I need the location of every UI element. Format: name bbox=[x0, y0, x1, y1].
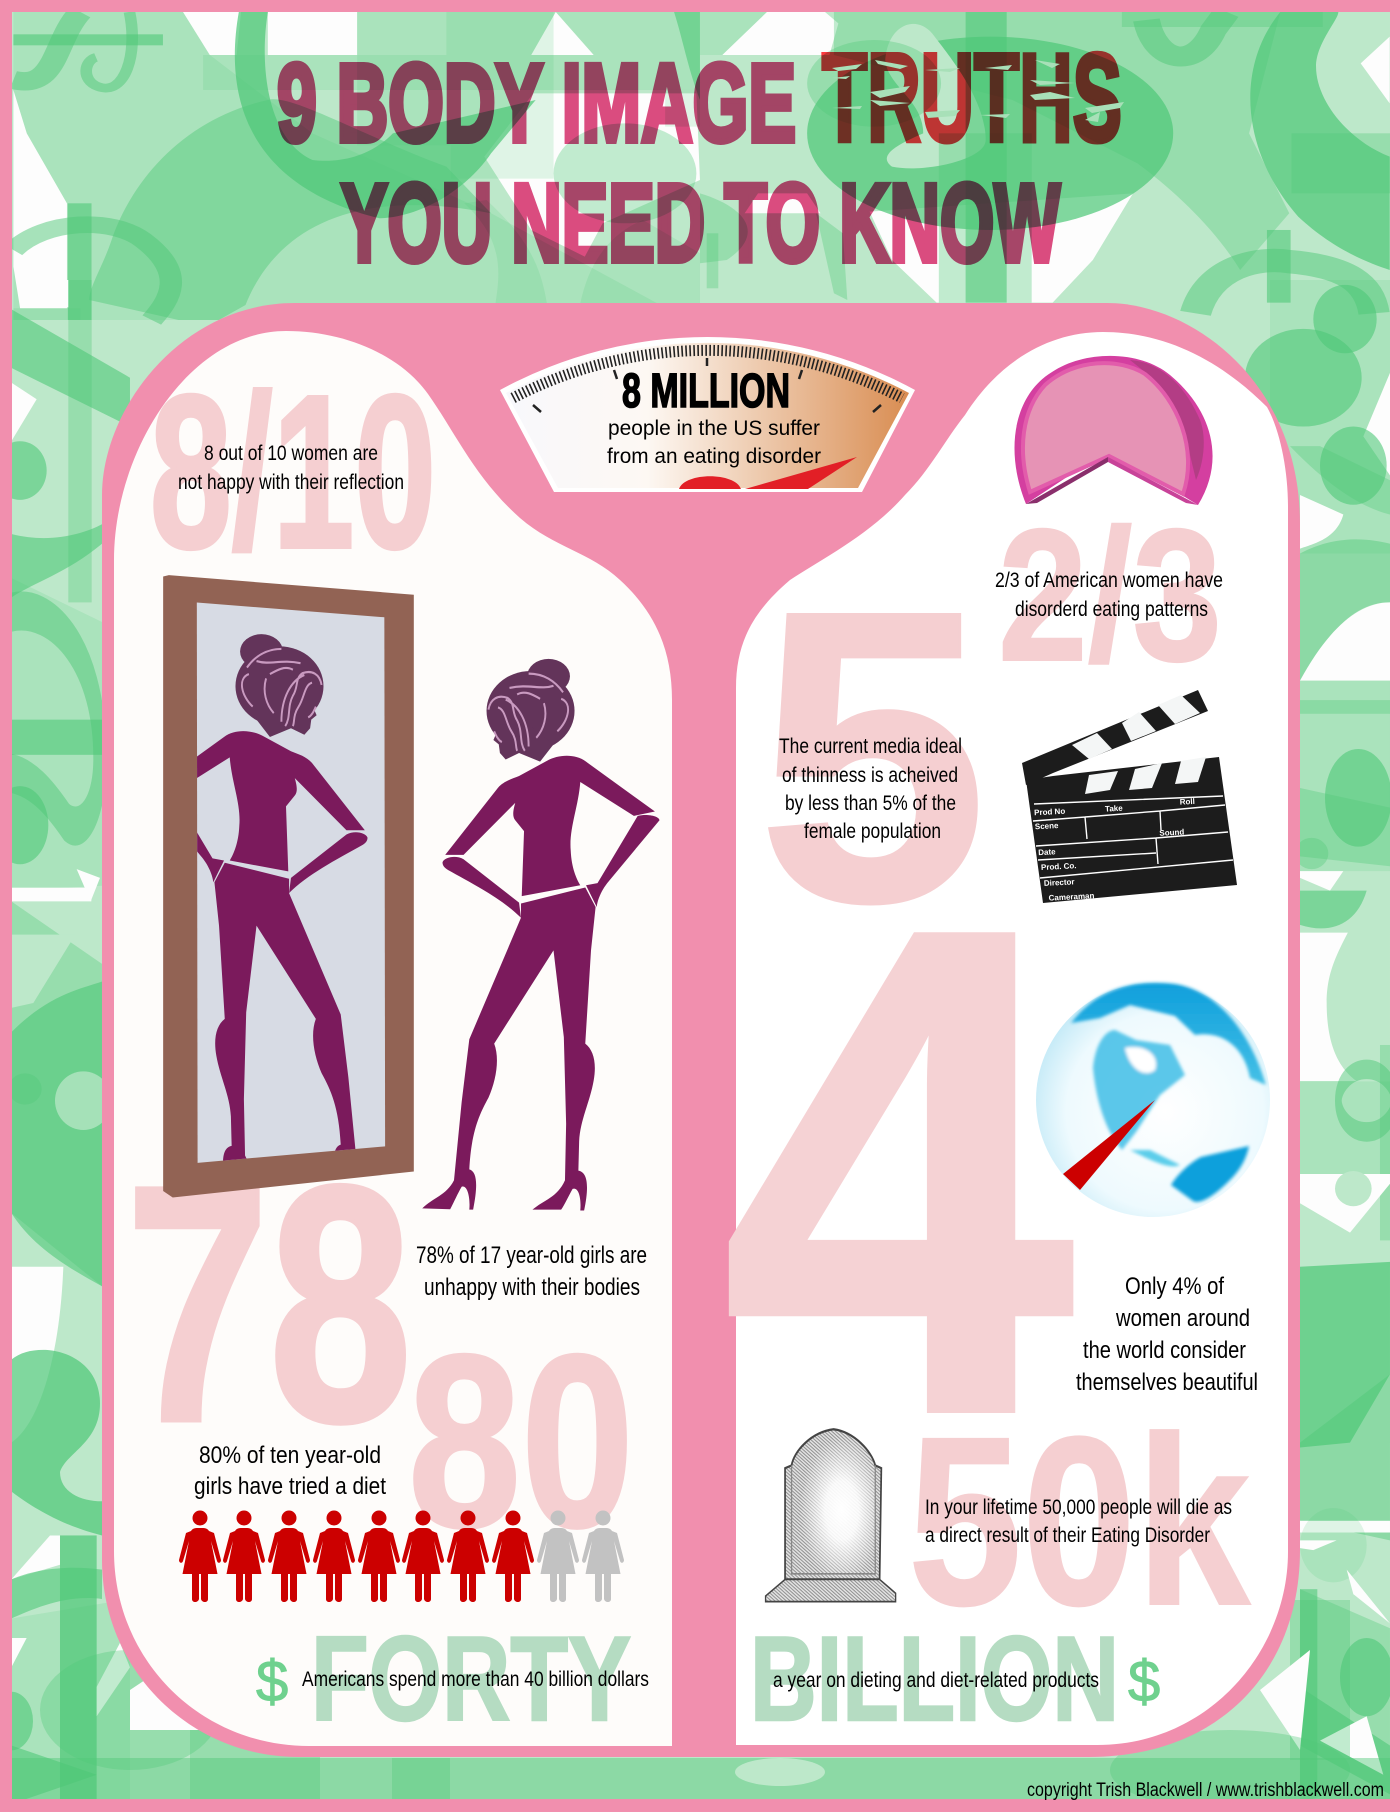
text: 78 percent bbox=[416, 1242, 647, 1301]
text: 8 out of 10 women bbox=[178, 442, 404, 494]
title word: truths: TRUTHS bbox=[822, 29, 1122, 168]
title line 1: 9 BODY IMAGE bbox=[277, 42, 796, 165]
title bbox=[277, 29, 1124, 285]
label: from an eating disorder: from an eating disorder bbox=[607, 445, 821, 468]
icon: film clapperboard: Roll bbox=[1180, 797, 1195, 807]
main pink panel bbox=[102, 303, 1300, 1757]
woman silhouette bbox=[422, 659, 660, 1211]
title word: truths bbox=[822, 29, 1124, 168]
icon: film clapperboard: Director bbox=[1044, 877, 1075, 888]
icon: dollar left: $ bbox=[256, 1649, 288, 1714]
icon: globe with wedge bbox=[1036, 983, 1270, 1217]
text: media ideal bbox=[779, 735, 962, 843]
big number: 4: 4 bbox=[722, 786, 1078, 1557]
text: media ideal: The current media ideal bbox=[779, 735, 962, 758]
icon: dollar right: $ bbox=[1128, 1649, 1160, 1714]
icon: tombstone bbox=[766, 1429, 896, 1602]
text: 50,000 people bbox=[925, 1496, 1232, 1547]
text: only 4 percent bbox=[1076, 1273, 1258, 1396]
stat: 8 million: 8 MILLION bbox=[622, 365, 790, 418]
text: media ideal: of thinness is acheived bbox=[782, 764, 958, 787]
text: 80 percent: girls have tried a diet bbox=[194, 1473, 386, 1500]
big word: forty: FORTY bbox=[311, 1612, 631, 1746]
text: a year on dieting: a year on dieting and diet-related products bbox=[773, 1669, 1099, 1692]
pictogram: 10 girls, 8 red bbox=[179, 1510, 624, 1602]
text: americans spend: Americans spend more than 40 billion dollars bbox=[302, 1668, 649, 1691]
text: 50,000 people: a direct result of their Eating Disorder bbox=[925, 1524, 1210, 1547]
text: 8 out of 10 women: 8 out of 10 women are bbox=[204, 442, 378, 465]
text: 78 percent: unhappy with their bodies bbox=[424, 1274, 640, 1301]
big number: 78: 78 bbox=[126, 1117, 412, 1492]
icon: film clapperboard: Scene bbox=[1035, 821, 1059, 831]
text: 2/3 of women bbox=[995, 569, 1223, 621]
text: only 4 percent: Only 4% of bbox=[1125, 1273, 1224, 1300]
text: only 4 percent: themselves beautiful bbox=[1076, 1369, 1258, 1396]
icon: film clapperboard: Take bbox=[1105, 804, 1123, 814]
big number: 50k: 50k bbox=[908, 1387, 1250, 1655]
text: 50,000 people: In your lifetime 50,000 people will die as bbox=[925, 1496, 1232, 1519]
needle bbox=[679, 457, 857, 489]
icon: film clapperboard: Prod No bbox=[1034, 807, 1066, 817]
text: 78 percent: 78% of 17 year-old girls are bbox=[416, 1242, 647, 1269]
right white panel bbox=[736, 332, 1288, 1745]
mirror with reflection bbox=[151, 575, 414, 1198]
icon: film clapperboard bbox=[1022, 690, 1237, 903]
text: only 4 percent: the world consider bbox=[1083, 1337, 1246, 1364]
text: media ideal: female population bbox=[804, 820, 941, 843]
text: 8 out of 10 women: not happy with their reflection bbox=[178, 471, 404, 494]
text: 80 percent: 80% of ten year-old bbox=[199, 1442, 381, 1469]
wedge bbox=[1063, 1100, 1155, 1190]
big number: 5: 5 bbox=[757, 524, 988, 988]
big number: 2/3: 2/3 bbox=[998, 490, 1222, 700]
icon: film clapperboard: Cameraman bbox=[1048, 891, 1095, 903]
icon: film clapperboard: Sound bbox=[1159, 827, 1185, 838]
icon: film clapperboard: Prod. Co. bbox=[1041, 861, 1077, 872]
big word: billion: BILLION bbox=[750, 1612, 1119, 1746]
text: 2/3 of women: disorderd eating patterns bbox=[1015, 598, 1208, 621]
big number: 8/10: 8/10 bbox=[150, 351, 436, 594]
big number: 80: 80 bbox=[408, 1304, 634, 1579]
icon: film clapperboard: Date bbox=[1038, 847, 1056, 857]
scale dial callout: 8 million bbox=[500, 337, 915, 492]
icon: pie chart two thirds bbox=[1014, 356, 1213, 505]
text: only 4 percent: women around bbox=[1115, 1305, 1250, 1332]
text: 2/3 of women: 2/3 of American women have bbox=[995, 569, 1223, 592]
label: people in the US suffer: people in the US suffer bbox=[608, 417, 820, 440]
text: media ideal: by less than 5% of the bbox=[785, 792, 956, 815]
text: 80 percent bbox=[194, 1442, 386, 1500]
left white panel bbox=[114, 331, 672, 1746]
